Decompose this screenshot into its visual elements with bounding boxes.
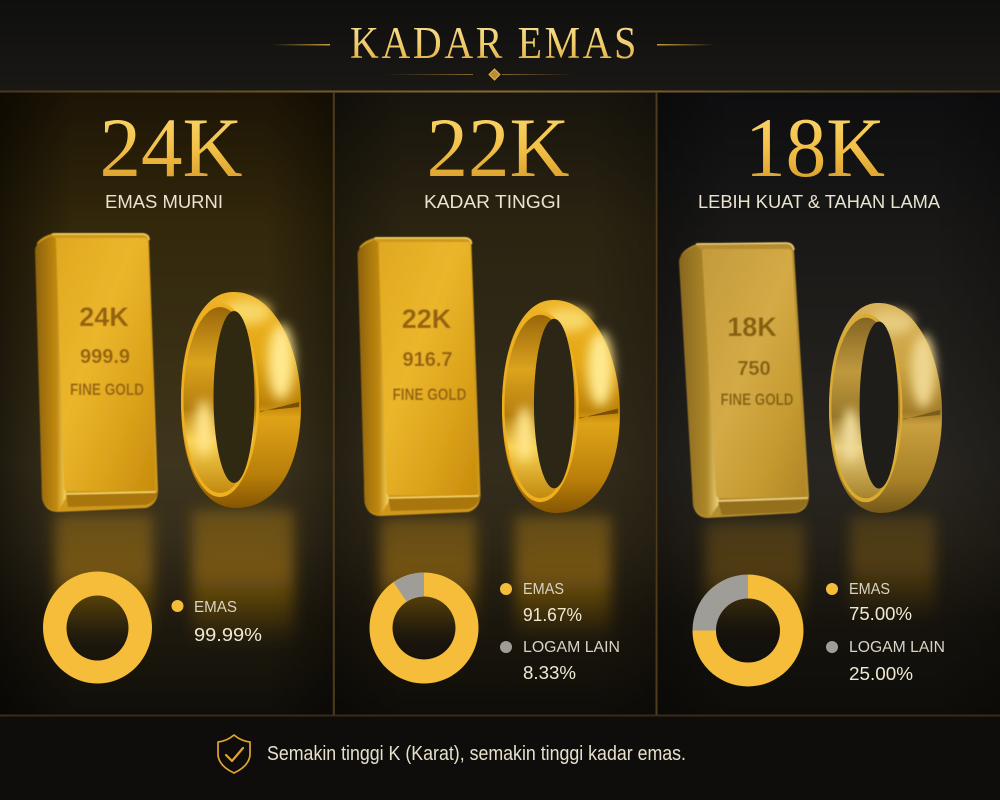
legend 18K: 75.00% (849, 603, 912, 624)
gold bar 18K (679, 243, 809, 518)
subheading: kadar tinggi: KADAR TINGGI (424, 192, 561, 212)
legend 18K: LOGAM LAIN (849, 639, 945, 656)
legend 18K: EMAS (849, 581, 890, 598)
legend 22K: 91.67% (523, 604, 582, 625)
legend 22K: EMAS (523, 581, 564, 598)
gold bar 24K: 999.9 (80, 346, 130, 368)
gold bar 18K: 750 (737, 358, 771, 380)
title: KADAR EMAS (350, 18, 639, 68)
reflections under bar and ring (705, 516, 935, 632)
gold bar 18K: FINE GOLD (720, 391, 794, 409)
gold bar 22K: FINE GOLD (392, 386, 467, 404)
panel: 18K (658, 92, 1000, 714)
gold ring 24K (181, 292, 301, 508)
donut chart 22K (370, 572, 479, 684)
gold bar 22K: 22K (402, 304, 452, 334)
donut chart 24K (43, 572, 152, 684)
donut chart 18K (692, 574, 804, 687)
legend 22K: 8.33% (523, 662, 576, 683)
gold bar 18K: 18K (727, 312, 777, 342)
reflections under bar and ring (380, 516, 611, 641)
reflections under bar and ring (55, 510, 294, 645)
gold bar 22K: 916.7 (402, 349, 453, 371)
gold bar 24K (35, 233, 158, 512)
text: note: Semakin tinggi K (Karat), semakin tinggi kadar emas. (267, 743, 686, 765)
panel: 24K (0, 92, 333, 714)
heading: 22K: 22K (426, 101, 570, 195)
legend 22K (500, 581, 620, 683)
title (272, 18, 715, 80)
gold bar 24K: 24K (79, 302, 129, 332)
heading: 24K: 24K (100, 101, 242, 195)
icon: shield check (218, 735, 250, 773)
legend 22K: LOGAM LAIN (523, 639, 620, 656)
legend 18K (826, 581, 945, 684)
footer note (218, 735, 686, 773)
panel: 22K (335, 92, 655, 714)
heading: 18K: 18K (745, 101, 885, 195)
gold bar 22K (358, 237, 480, 516)
gold bar 24K: FINE GOLD (70, 381, 144, 399)
legend 24K (172, 599, 262, 645)
legend 24K: EMAS (194, 599, 237, 616)
subheading: lebih kuat: LEBIH KUAT & TAHAN LAMA (698, 192, 940, 212)
gold ring 18K (829, 303, 942, 513)
legend 18K: 25.00% (849, 663, 913, 684)
header band (0, 0, 1000, 91)
gold ring 22K (502, 300, 620, 513)
subheading: emas murni: EMAS MURNI (105, 192, 223, 212)
legend 24K: 99.99% (194, 624, 262, 645)
